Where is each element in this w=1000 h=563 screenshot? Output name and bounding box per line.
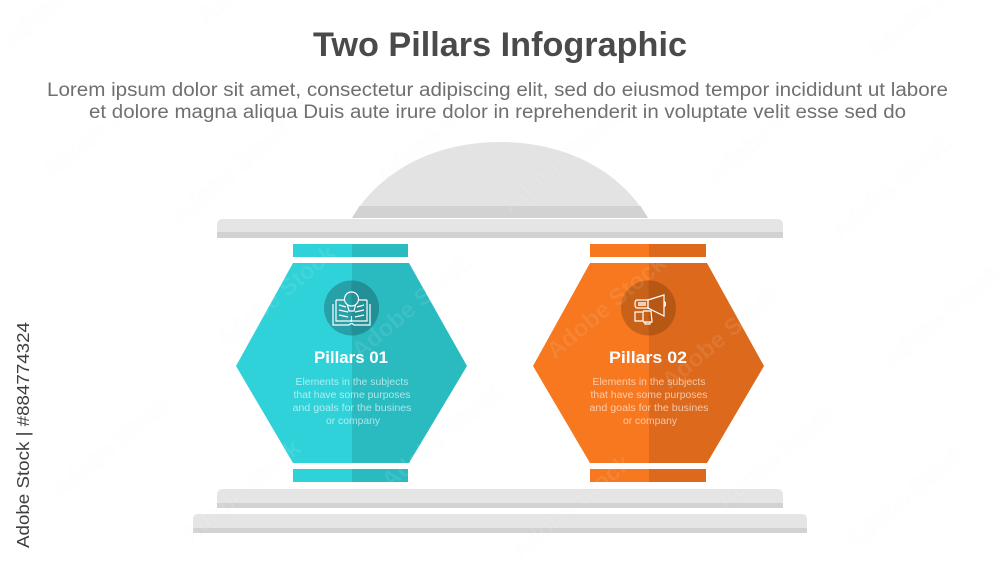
subtitle text block: Lorem ipsum dolor sit amet, consectetur adipiscing elit, sed do eiusmod tempor incididunt ut labore <box>47 80 948 101</box>
icon: book with light bulb <box>324 280 379 336</box>
pillar 01 hexagon <box>236 263 467 463</box>
diagonal watermark pattern: Adobe Stock <box>542 249 672 365</box>
diagonal watermark pattern: Adobe Stock <box>37 69 167 185</box>
pillar 02 description: that have some purposes <box>590 389 708 401</box>
diagonal watermark pattern: Adobe Stock <box>507 449 637 563</box>
panel: pillar 02 <box>533 244 764 482</box>
pillar 02 heading: Pillars 02 <box>609 348 687 367</box>
diagonal watermark pattern: Adobe Stock <box>177 434 307 550</box>
diagonal watermark pattern: Adobe Stock <box>657 279 787 395</box>
pillar 02 description <box>590 376 708 427</box>
pillar 01 heading: Pillars 01 <box>314 348 388 367</box>
pillar 01 description <box>292 376 412 427</box>
diagonal watermark pattern: Adobe Stock <box>702 74 832 190</box>
pillar 01 description: Elements in the subjects <box>296 376 408 388</box>
diagonal watermark pattern: Adobe Stock <box>497 104 627 220</box>
diagonal watermark pattern: Adobe Stock <box>47 389 177 505</box>
pillar 02 bottom cap <box>590 469 706 482</box>
pillar 01 description: that have some purposes <box>294 389 410 401</box>
pillar 02 description: and goals for the busines <box>590 402 708 414</box>
diagonal watermark pattern: Adobe Stock <box>347 249 477 365</box>
diagonal watermark pattern: Adobe Stock <box>842 439 972 555</box>
icon: megaphone <box>621 280 676 336</box>
title: Two Pillars Infographic <box>313 26 687 64</box>
pillar 02 hexagon <box>533 263 764 463</box>
diagonal watermark pattern: Adobe Stock <box>167 114 297 230</box>
subtitle text block: et dolore magna aliqua Duis aute irure dolor in reprehenderit in voluptate velit esse sed do <box>89 102 906 123</box>
stock watermark id: Adobe Stock | #884774324 <box>13 322 33 548</box>
lower base step <box>193 514 807 533</box>
diagonal watermark pattern: Adobe Stock <box>212 239 342 355</box>
upper base step <box>217 489 783 508</box>
diagonal watermark pattern: Adobe Stock <box>712 399 842 515</box>
pillar 02 top cap <box>590 244 706 257</box>
pillar 01 bottom cap <box>293 469 408 482</box>
pillar 01 description: and goals for the busines <box>292 402 412 414</box>
pillar 01 description: or company <box>326 415 381 427</box>
diagonal watermark pattern: Adobe Stock <box>827 129 957 245</box>
subtitle text block <box>47 80 948 123</box>
panel: pillar 01 <box>236 244 467 482</box>
diagonal watermark pattern: Adobe Stock <box>372 74 502 190</box>
pillar 02 description: or company <box>623 415 678 427</box>
pillar 01 top cap <box>293 244 408 257</box>
diagonal watermark pattern: Adobe Stock <box>377 379 507 495</box>
pillar 02 description: Elements in the subjects <box>592 376 706 388</box>
top beam <box>217 219 783 238</box>
dome roof <box>352 142 648 218</box>
